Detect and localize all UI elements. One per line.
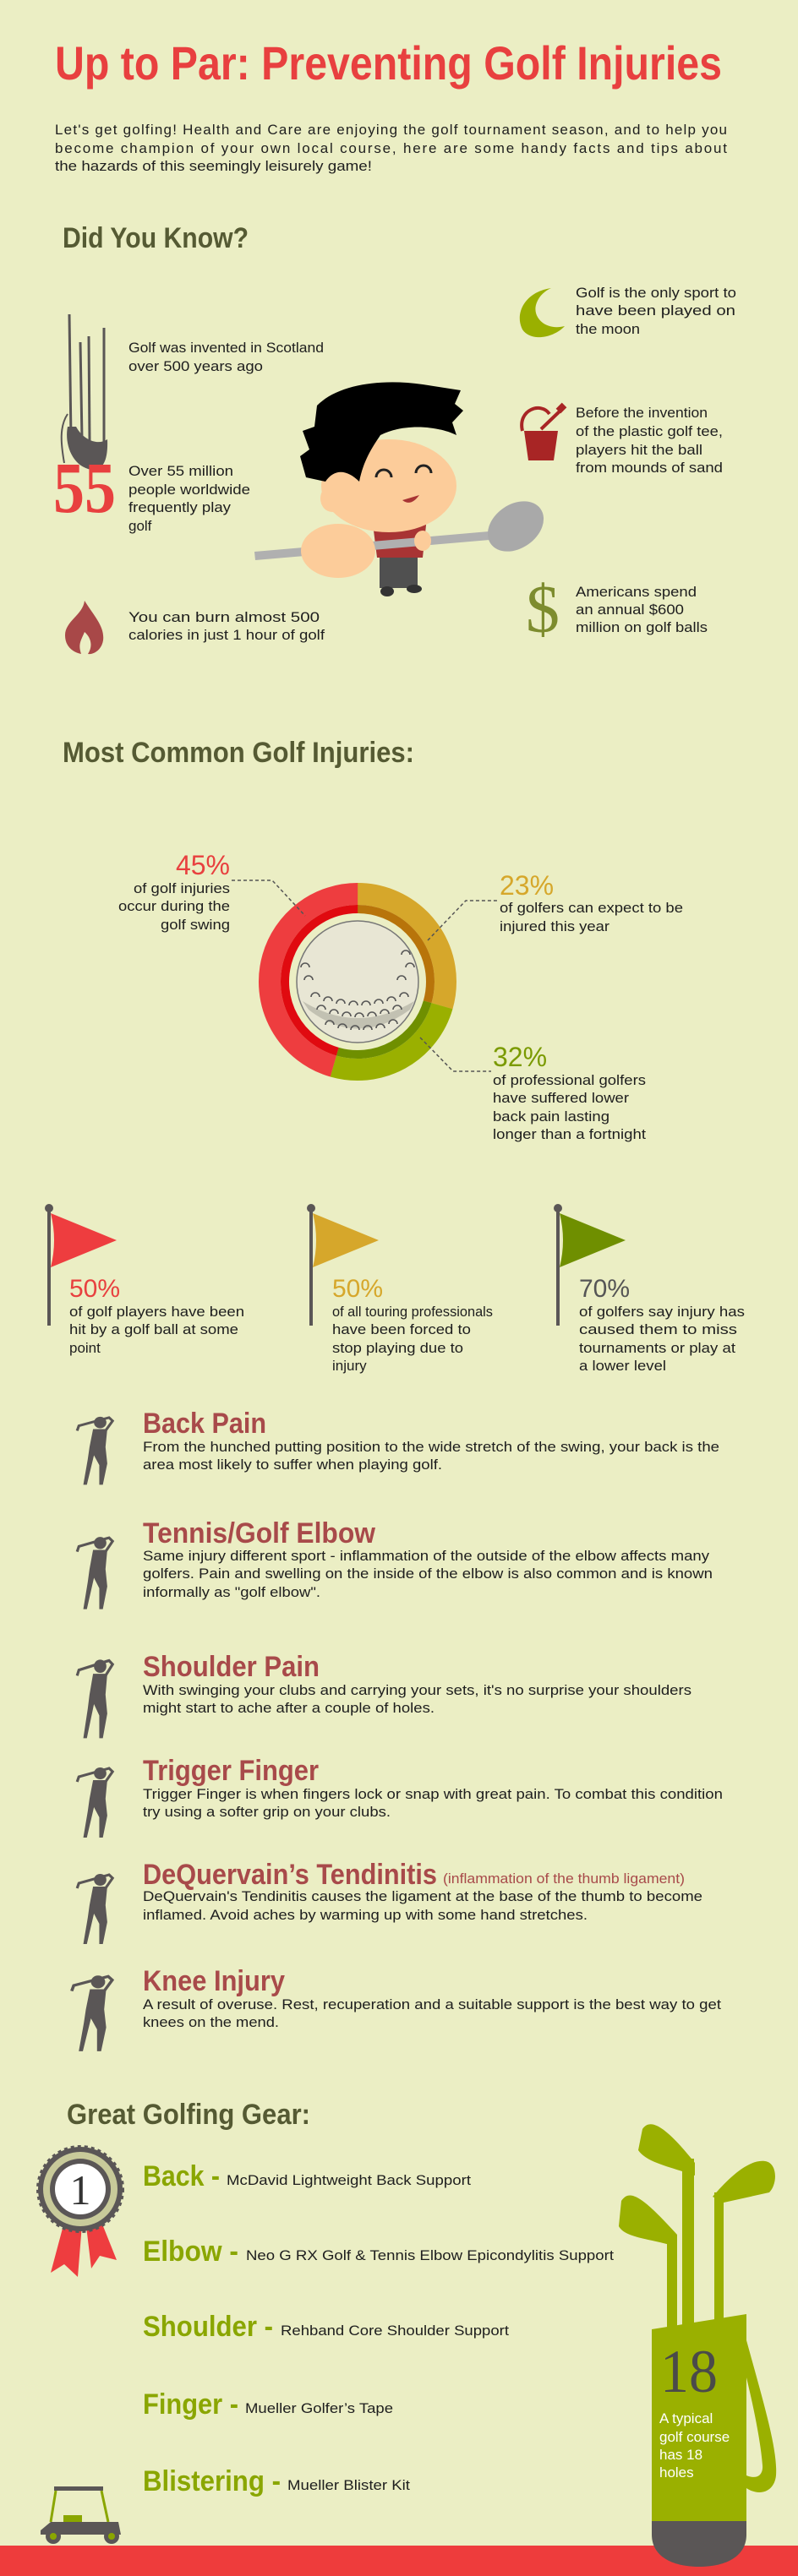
callout: 45%: of golf injuries — [134, 880, 230, 896]
callout: 32%: of professional golfers — [493, 1072, 646, 1088]
callout: 32%: back pain lasting — [493, 1108, 609, 1125]
flag stat 2: of all touring professionals — [332, 1304, 493, 1320]
injury: shoulder pain: might start to ache after a couple of holes. — [143, 1700, 435, 1716]
flag stat 1 — [45, 1204, 244, 1356]
heading: did you know: Did You Know? — [63, 222, 249, 254]
icon: bucket — [522, 403, 566, 460]
flag stat 2: 50% — [332, 1275, 383, 1303]
gear list: Elbow - — [143, 2236, 238, 2268]
callout: 23%: of golfers can expect to be — [500, 900, 683, 916]
injury: back pain: From the hunched putting position to the wide stretch of the swing, your back is the — [143, 1439, 719, 1455]
heading: great golfing gear: Great Golfing Gear: — [67, 2099, 310, 2131]
injury: dequervain's tendinitis: inflamed. Avoid aches by warming up with some hand stretches. — [143, 1907, 588, 1923]
fact: tee — [576, 405, 723, 476]
golf bag with 18 holes stat: A typical — [659, 2410, 713, 2426]
intro text: the hazards of this seemingly leisurely game! — [55, 158, 372, 174]
golf bag with 18 holes stat: holes — [659, 2464, 694, 2481]
gear list: Finger - — [143, 2388, 238, 2421]
injury: knee injury: Knee Injury — [143, 1965, 285, 1997]
fact: tee: players hit the ball — [576, 442, 702, 458]
gear list: Mueller Golfer’s Tape — [245, 2400, 393, 2416]
injury: shoulder pain: With swinging your clubs and carrying your sets, it's no surprise your shoulders — [143, 1682, 691, 1698]
golf bag with 18 holes stat — [619, 2124, 776, 2567]
icon: award ribbon — [38, 2147, 123, 2277]
callout: 23%: 23% — [500, 870, 554, 901]
fact: 55 million: golf — [128, 518, 152, 534]
golf bag with 18 holes stat: has 18 — [659, 2447, 702, 2463]
injury: dequervain's tendinitis: DeQuervain's Tendinitis causes the ligament at the base of the thumb to become — [143, 1888, 702, 1904]
fact: moon: Golf is the only sport to — [576, 285, 736, 301]
injury: tennis/golf elbow: golfers. Pain and swelling on the inside of the elbow is also common and is known — [143, 1566, 713, 1582]
injury: knee injury: knees on the mend. — [143, 2014, 279, 2030]
fact: calories — [128, 609, 325, 643]
injury: shoulder pain: Shoulder Pain — [143, 1651, 320, 1683]
gear list: Rehband Core Shoulder Support — [281, 2323, 509, 2339]
icon: moon — [520, 288, 565, 337]
fact: 55 million — [128, 463, 250, 534]
golf bag with 18 holes stat: 18 — [660, 2338, 718, 2405]
flag stat 1: hit by a golf ball at some — [69, 1321, 238, 1337]
gear list: Neo G RX Golf & Tennis Elbow Epicondylitis Support — [246, 2247, 614, 2263]
fact: scotland — [128, 340, 324, 374]
gear list — [143, 2160, 614, 2497]
injury: knee injury — [72, 1965, 721, 2051]
fact: dollar — [576, 584, 708, 635]
injury: trigger finger: Trigger Finger — [143, 1755, 319, 1787]
fact: dollar: million on golf balls — [576, 619, 708, 635]
injury: tennis/golf elbow — [77, 1517, 713, 1609]
gear list: Back - — [143, 2160, 220, 2192]
fact: tee: Before the invention — [576, 405, 708, 421]
intro text: Let's get golfing! Health and Care are enjoying the golf tournament season, and to help you — [55, 122, 727, 138]
flag stat 1: 50% — [69, 1275, 120, 1303]
flag stat 2 — [307, 1204, 493, 1374]
fact: moon: have been played on — [576, 302, 735, 319]
callout: 32%: have suffered lower — [493, 1090, 629, 1106]
callout: 45%: golf swing — [161, 917, 230, 933]
flag stat 3: of golfers say injury has — [579, 1304, 745, 1320]
injury: trigger finger: Trigger Finger is when fingers lock or snap with great pain. To combat this condition — [143, 1786, 723, 1802]
fact: calories: calories in just 1 hour of golf — [128, 627, 325, 643]
gear list: Shoulder - — [143, 2311, 273, 2343]
fact: dollar: an annual $600 — [576, 602, 684, 618]
heading: most common golf injuries: Most Common Golf Injuries: — [63, 737, 414, 769]
fact: moon — [576, 285, 736, 337]
icon: dollar: $ — [526, 573, 560, 647]
injury: trigger finger: try using a softer grip on your clubs. — [143, 1804, 391, 1820]
callout: 45%: occur during the — [118, 898, 230, 914]
illustration: cartoon golfer boy — [254, 382, 553, 596]
callout: 32% — [420, 1037, 646, 1142]
callout: 45% — [118, 850, 305, 933]
injury: tennis/golf elbow: Tennis/Golf Elbow — [143, 1517, 376, 1549]
gear list: McDavid Lightweight Back Support — [227, 2172, 471, 2188]
golf ball — [297, 921, 418, 1043]
flag stat 2: stop playing due to — [332, 1340, 463, 1356]
flag stat 3: 70% — [579, 1275, 630, 1303]
injury: back pain — [77, 1408, 719, 1484]
fact: tee: from mounds of sand — [576, 460, 723, 476]
injury: tennis/golf elbow: informally as "golf elbow". — [143, 1584, 320, 1600]
intro text — [55, 122, 727, 174]
intro text: become champion of your own local course, here are some handy facts and tips about — [55, 140, 727, 156]
flag stat 2: have been forced to — [332, 1321, 471, 1337]
fact: 55 million: people worldwide — [128, 482, 250, 498]
icon: bagpipe — [62, 314, 107, 470]
injury: back pain: Back Pain — [143, 1408, 266, 1440]
injury: trigger finger — [77, 1755, 723, 1838]
injury: back pain: area most likely to suffer when playing golf. — [143, 1457, 442, 1473]
flag stat 3: a lower level — [579, 1358, 666, 1374]
callout: 23%: injured this year — [500, 918, 609, 934]
fact: tee: of the plastic golf tee, — [576, 423, 723, 439]
injury: dequervain's tendinitis — [77, 1859, 702, 1944]
icon: flame — [65, 601, 103, 654]
fact: scotland: over 500 years ago — [128, 358, 263, 374]
callout: 45%: 45% — [176, 850, 230, 880]
injury: tennis/golf elbow: Same injury different sport - inflammation of the outside of the elbow affects many — [143, 1548, 710, 1564]
flag stat 1: point — [69, 1340, 101, 1356]
callout: 23% — [428, 870, 683, 940]
gear list: Blistering - — [143, 2465, 281, 2497]
injury: shoulder pain — [77, 1651, 691, 1738]
callout: 32%: 32% — [493, 1042, 547, 1072]
golf bag with 18 holes stat: golf course — [659, 2429, 730, 2445]
flag stat 3: caused them to miss — [579, 1321, 737, 1337]
icon: 55: 55 — [53, 447, 116, 528]
flag stat 1: of golf players have been — [69, 1304, 244, 1320]
icon: award ribbon: 1 — [69, 2166, 91, 2214]
flag stat 3: tournaments or play at — [579, 1340, 735, 1356]
fact: moon: the moon — [576, 321, 640, 337]
injury: dequervain's tendinitis: DeQuervain’s Tendinitis — [143, 1859, 437, 1891]
injury: dequervain's tendinitis: (inflammation of the thumb ligament) — [443, 1871, 685, 1887]
fact: 55 million: Over 55 million — [128, 463, 233, 479]
fact: dollar: Americans spend — [576, 584, 697, 600]
icon: golf cart — [41, 2486, 121, 2544]
fact: 55 million: frequently play — [128, 499, 232, 515]
flag stat 2: injury — [332, 1358, 367, 1374]
injury: knee injury: A result of overuse. Rest, recuperation and a suitable support is the best way to get — [143, 1996, 721, 2012]
gear list: Mueller Blister Kit — [287, 2477, 410, 2493]
callout: 32%: longer than a fortnight — [493, 1126, 646, 1142]
footer band — [0, 2546, 798, 2576]
fact: calories: You can burn almost 500 — [128, 609, 320, 625]
fact: scotland: Golf was invented in Scotland — [128, 340, 324, 356]
flag stat 3 — [554, 1204, 745, 1374]
donut chart — [249, 873, 467, 1091]
